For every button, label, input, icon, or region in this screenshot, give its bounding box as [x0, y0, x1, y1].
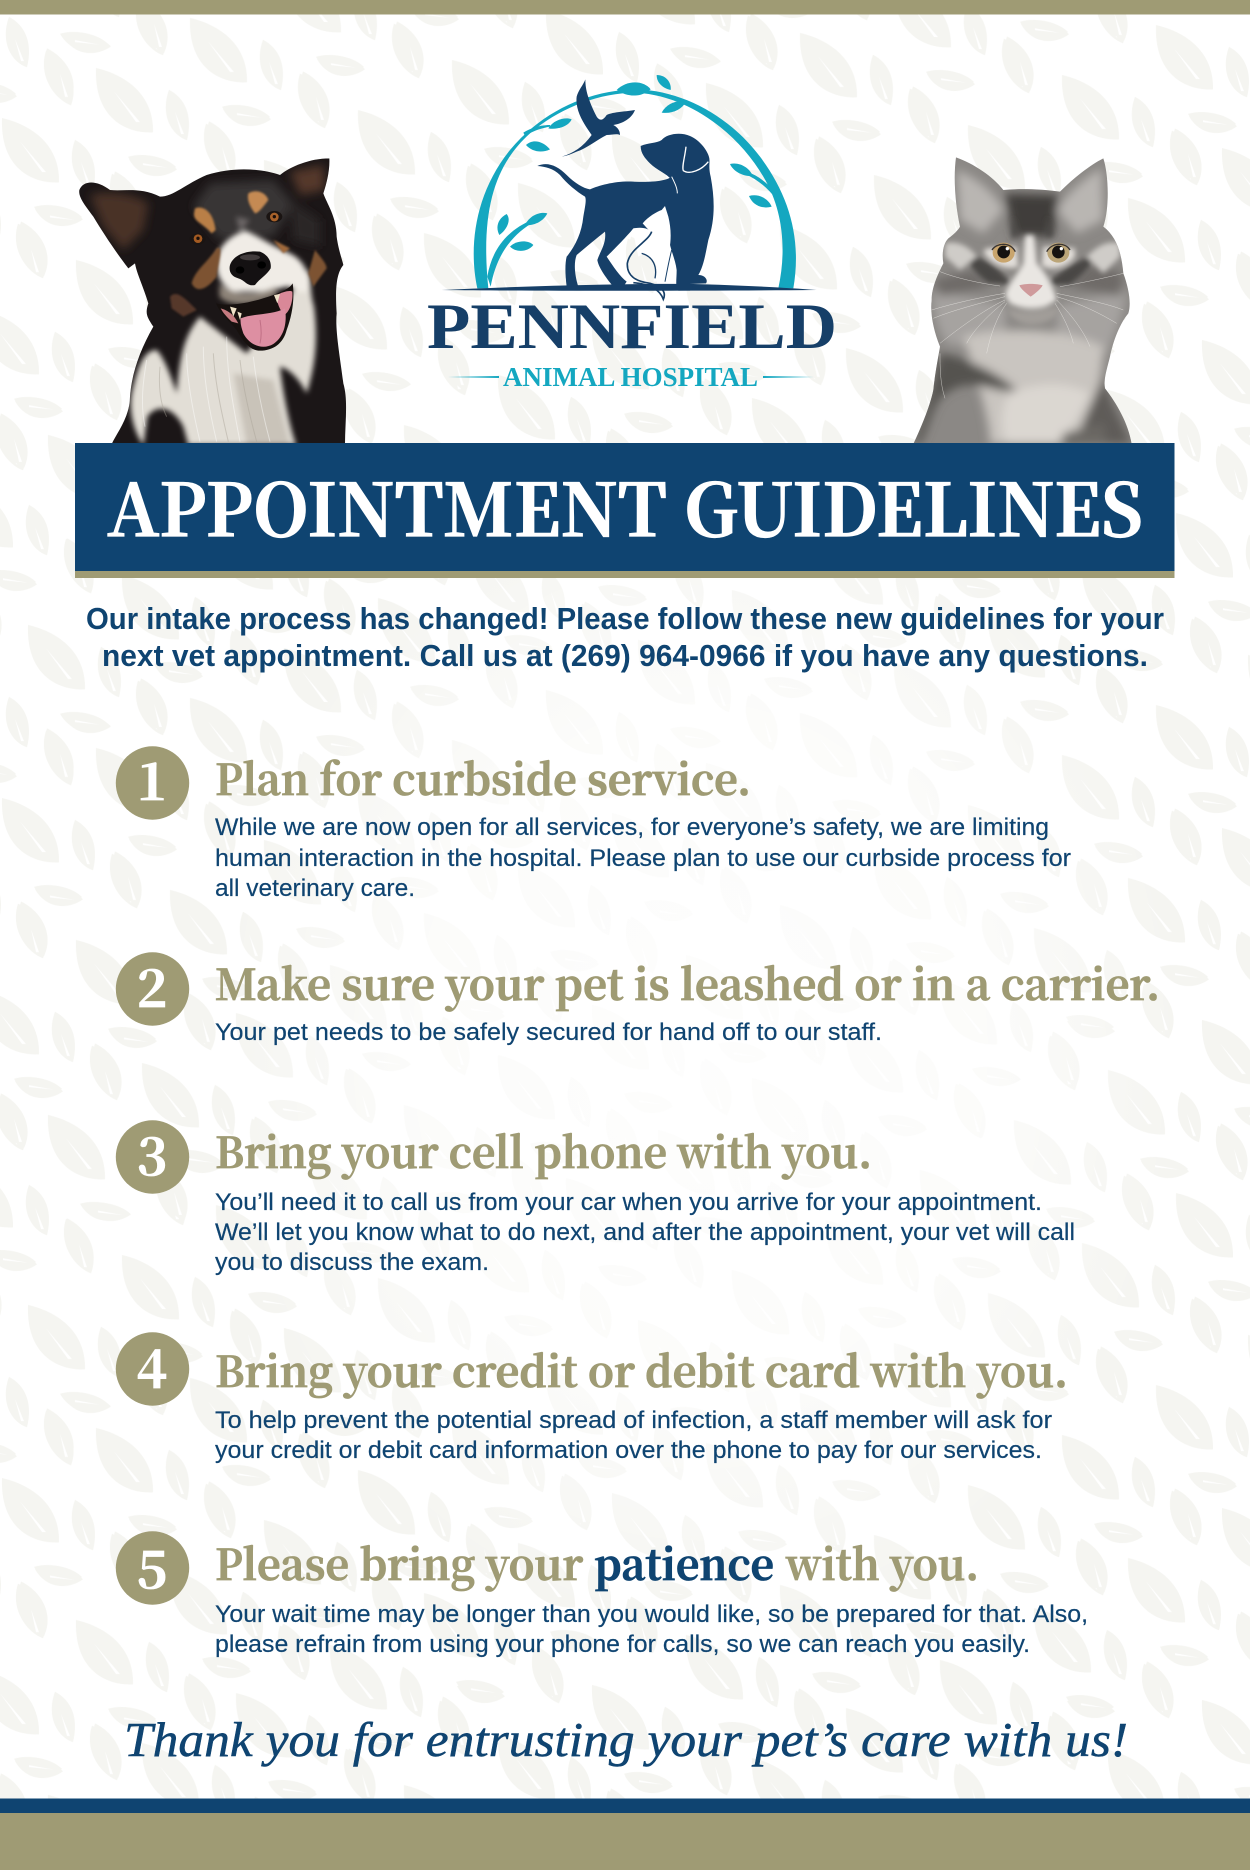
- step 3 body: We’ll let you know what to do next, and after the appointment, your vet will call: [215, 1219, 1075, 1246]
- number badge 3: 3: [137, 1115, 167, 1190]
- dog mouth and tongue: [216, 283, 293, 351]
- step 5 heading: patience: [594, 1532, 774, 1593]
- step 3 body: You’ll need it to call us from your car when you arrive for your appointment.: [215, 1189, 1042, 1216]
- step 5 body: please refrain from using your phone for calls, so we can reach you easily.: [215, 1631, 1030, 1658]
- cat outline between the dogs: [627, 147, 708, 299]
- step 3 body: [215, 1189, 1075, 1276]
- number badge 5: 5: [137, 1528, 167, 1603]
- photo: cat: [910, 153, 1137, 445]
- closing message: Thank you for entrusting your pet’s care with us!: [124, 1712, 1128, 1767]
- cat eyes: [992, 243, 1070, 263]
- step 3 body: you to discuss the exam.: [215, 1249, 489, 1276]
- footer bands: [0, 1798, 1250, 1870]
- dog nose: [230, 251, 271, 285]
- step 4: [116, 1327, 1068, 1464]
- step 5 body: Your wait time may be longer than you would like, so be prepared for that. Also,: [215, 1601, 1088, 1628]
- photo: dog: [77, 157, 350, 445]
- step 1 body: While we are now open for all services, for everyone’s safety, we are limiting: [215, 814, 1049, 841]
- title: APPOINTMENT GUIDELINES: [107, 453, 1143, 557]
- number badge 2: [116, 947, 189, 1026]
- step 5 heading: Please bring your: [215, 1532, 584, 1593]
- step 5 heading: [215, 1532, 979, 1593]
- title banner: [75, 443, 1174, 578]
- logo subtitle with rules: ANIMAL HOSPITAL: [503, 362, 758, 392]
- logo: Pennfield Animal Hospital: [427, 75, 837, 392]
- number badge 1: [116, 740, 189, 820]
- step 4 body: To help prevent the potential spread of infection, a staff member will ask for: [215, 1407, 1052, 1434]
- arch with branches: [474, 75, 796, 288]
- step 2 body: Your pet needs to be safely secured for hand off to our staff.: [215, 1019, 882, 1046]
- step 1 body: [215, 814, 1071, 902]
- cat whiskers: [932, 272, 1123, 398]
- step 3: [116, 1115, 1075, 1276]
- step 2: [116, 947, 1160, 1046]
- number badge 1: 1: [137, 740, 167, 815]
- intro text: next vet appointment. Call us at (269) 964-0966 if you have any questions.: [102, 638, 1148, 673]
- step 4 heading: Bring your credit or debit card with you.: [215, 1339, 1068, 1400]
- intro text: [86, 601, 1164, 673]
- step 1 heading: Plan for curbside service.: [215, 747, 751, 808]
- dog eyes: [190, 211, 282, 245]
- step 5 heading: with you.: [785, 1532, 979, 1593]
- number badge 4: [116, 1327, 189, 1406]
- animal silhouettes: [442, 79, 817, 291]
- step 1 body: human interaction in the hospital. Please plan to use our curbside process for: [215, 845, 1071, 872]
- logo name: PENNFIELD: [427, 291, 837, 363]
- number badge 3: [116, 1115, 189, 1194]
- step 5: [116, 1528, 1088, 1658]
- number badge 2: 2: [137, 947, 167, 1022]
- top band: [0, 0, 1250, 14]
- step 1: [116, 740, 1071, 902]
- step 4 body: [215, 1407, 1052, 1464]
- step 2 heading: Make sure your pet is leashed or in a carrier.: [215, 952, 1160, 1013]
- logo emblem: [442, 75, 817, 299]
- step 3 heading: Bring your cell phone with you.: [215, 1120, 872, 1181]
- step 1 body: all veterinary care.: [215, 875, 415, 902]
- number badge 4: 4: [137, 1327, 167, 1402]
- cat nose: [1019, 284, 1043, 297]
- dog fur strands: [142, 337, 270, 442]
- step 4 body: your credit or debit card information over the phone to pay for our services.: [215, 1437, 1042, 1464]
- step 5 body: [215, 1601, 1088, 1658]
- intro text: Our intake process has changed! Please follow these new guidelines for your: [86, 601, 1164, 636]
- number badge 5: [116, 1528, 189, 1605]
